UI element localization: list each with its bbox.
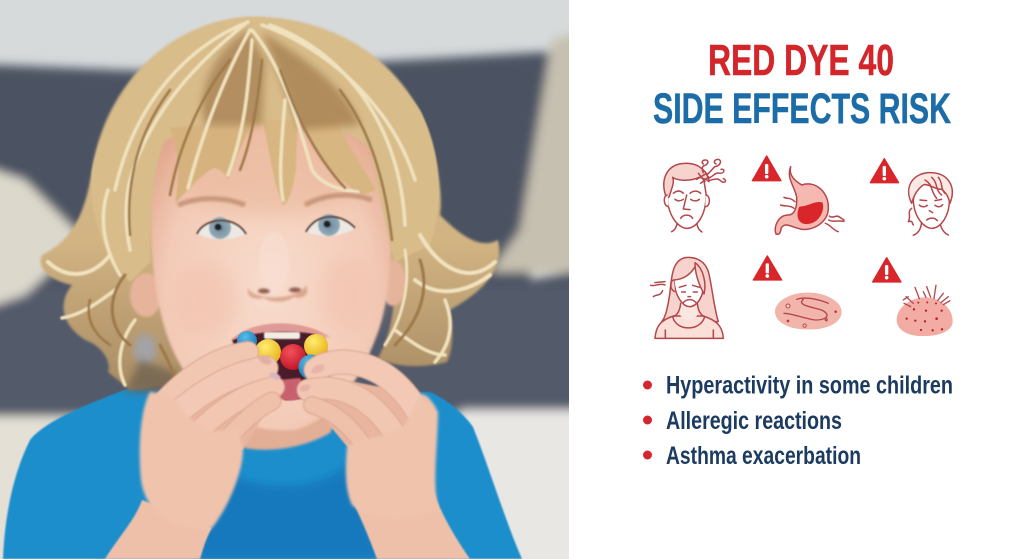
face — [150, 113, 391, 430]
nose — [248, 232, 307, 302]
hair cap and fringe — [91, 17, 439, 282]
hair back with curls — [41, 17, 499, 390]
title — [653, 36, 951, 133]
eyes — [197, 214, 355, 239]
right palm — [346, 394, 438, 518]
hair shadow near parting — [202, 30, 360, 130]
title line 1: RED DYE 40 — [708, 36, 894, 85]
right hand and arm — [298, 362, 470, 559]
icon: skin rash — [775, 293, 842, 330]
neck — [244, 417, 334, 452]
left hand and arm — [105, 352, 282, 559]
icon: warning 1 — [752, 156, 781, 181]
photo: child eating candy — [0, 0, 590, 559]
bullet: allergic reactions: Alleregic reactions — [666, 407, 842, 435]
left palm — [140, 392, 243, 528]
icon: stomach — [775, 167, 844, 234]
icon grid: symptoms — [651, 156, 953, 338]
ears — [130, 273, 162, 317]
hair strands — [48, 22, 495, 388]
child's shirt — [3, 388, 522, 559]
cheek tone — [191, 270, 235, 329]
left fingers — [165, 352, 248, 400]
bullet list — [643, 372, 953, 470]
icon: long-haired girl — [651, 257, 723, 338]
curls — [48, 255, 110, 274]
icon: warning 3 — [753, 256, 782, 280]
bullet: asthma: Asthma exacerbation — [666, 442, 861, 470]
icon: sad woman — [908, 173, 952, 235]
mouth and candies — [231, 323, 331, 400]
brows — [178, 195, 372, 205]
icon: warning 4 — [873, 258, 901, 282]
icon: warning 2 — [870, 159, 899, 183]
bullet: hyperactivity: Hyperactivity in some children — [666, 372, 953, 400]
icon: headache boy — [664, 159, 725, 232]
right fingers — [316, 362, 418, 412]
icon: hives bump — [897, 285, 953, 336]
